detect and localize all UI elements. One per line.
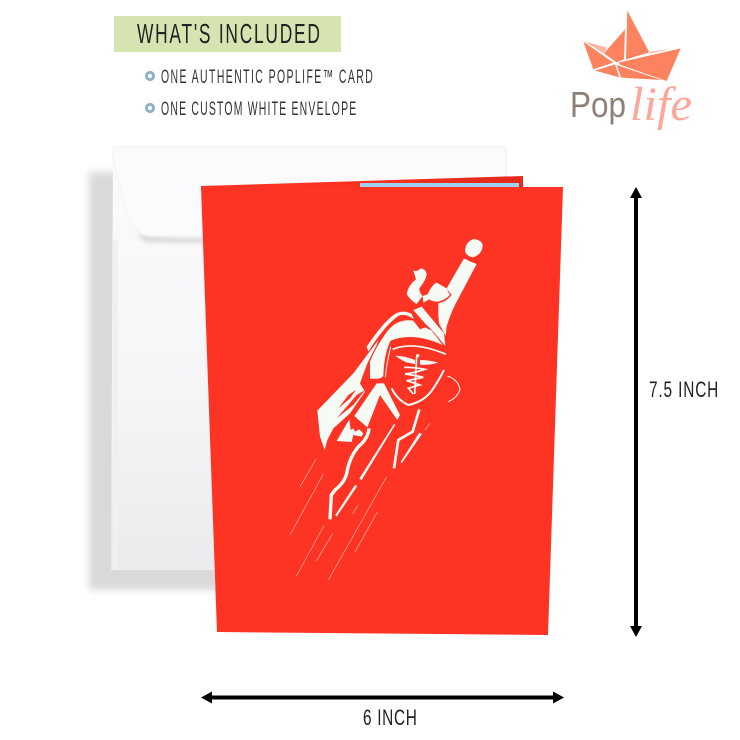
heading: what's included: WHAT'S INCLUDED — [137, 18, 320, 49]
hero cape lower — [317, 340, 400, 450]
label: width: 6 INCH — [363, 706, 417, 731]
item: poplife card: ONE AUTHENTIC POPLIFE™ CARD — [161, 67, 373, 88]
hero torso, cape and shield — [367, 307, 460, 405]
list: included items — [146, 67, 373, 120]
envelope body — [111, 146, 506, 570]
hero head and arm — [407, 239, 483, 336]
icon: caduceus — [395, 354, 438, 394]
logo: poplife — [570, 11, 692, 131]
card inner strip — [360, 183, 519, 188]
card front panel — [201, 187, 563, 635]
label: height: 7.5 INCH — [649, 378, 718, 403]
hero legs — [330, 409, 422, 519]
arrow: height — [630, 187, 642, 637]
logo wordmark: Pop — [570, 84, 626, 125]
speed lines — [290, 423, 430, 580]
card back panel — [201, 176, 523, 190]
logo wordmark: life — [630, 78, 692, 131]
envelope flap — [113, 147, 506, 236]
item: envelope: ONE CUSTOM WHITE ENVELOPE — [161, 99, 356, 120]
heading: what's included — [114, 16, 341, 52]
icon: origami boat — [583, 11, 681, 81]
envelope shadow — [89, 172, 229, 590]
arrow: width — [201, 692, 564, 704]
logo wordmark — [570, 78, 692, 131]
envelope flap shadow — [135, 233, 205, 243]
hero cut-out figure — [290, 239, 483, 580]
pop-up card — [201, 176, 563, 635]
envelope side seam — [113, 240, 118, 570]
envelope — [89, 146, 506, 590]
